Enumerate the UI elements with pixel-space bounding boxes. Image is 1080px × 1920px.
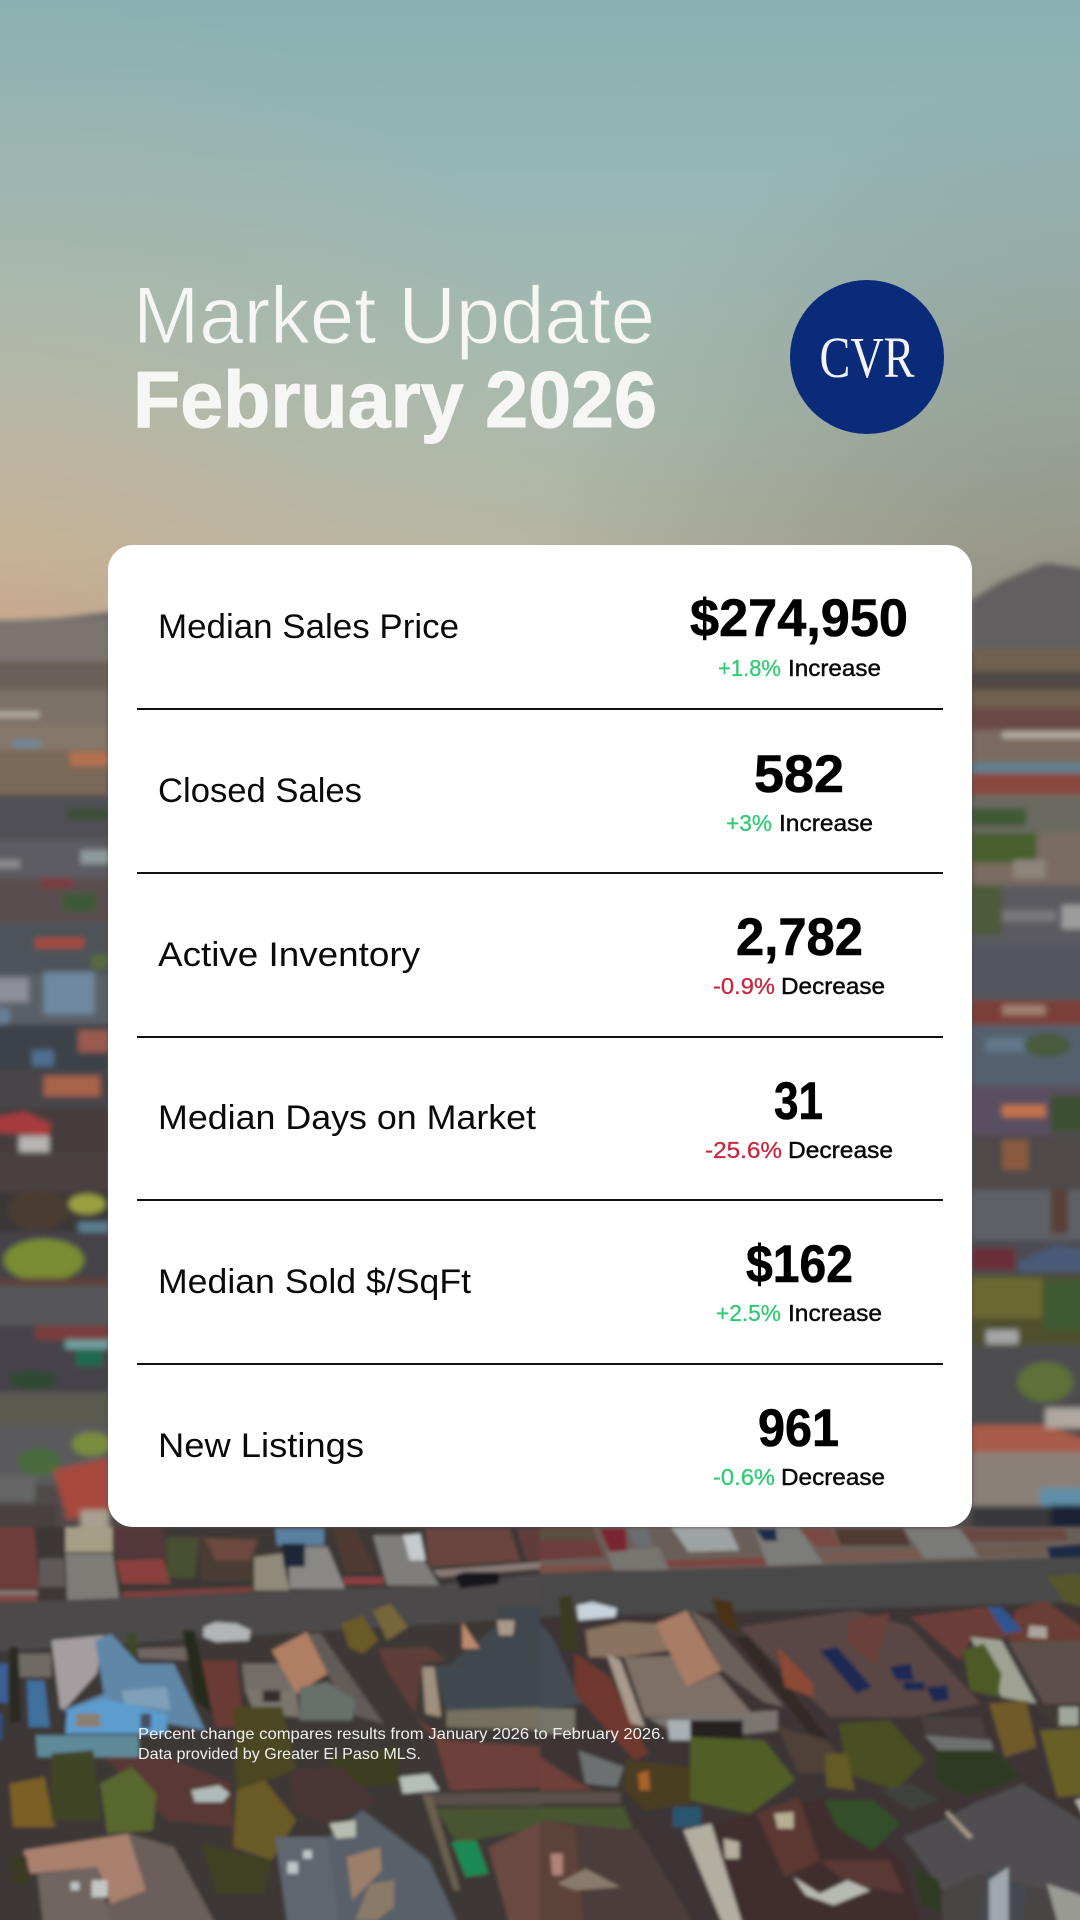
row: median days on market: Median Days on Market (158, 1099, 537, 1137)
title: February 2026 (133, 355, 657, 444)
row: active inventory: -0.9% (713, 973, 775, 999)
row: active inventory: Decrease (781, 973, 885, 999)
row: new listings: 961 (758, 1399, 839, 1458)
row: new listings: -0.6% (713, 1464, 775, 1490)
row: closed sales: Increase (779, 810, 873, 836)
row: new listings: Decrease (781, 1464, 885, 1490)
row: median days on market (158, 1072, 893, 1163)
row: active inventory: 2,782 (736, 908, 863, 967)
footnote: Data provided by Greater El Paso MLS. (138, 1746, 421, 1763)
row: active inventory (158, 908, 885, 999)
row: closed sales: +3% (726, 810, 772, 836)
row: median sold price per square foot: Increase (788, 1300, 882, 1326)
row: closed sales: Closed Sales (158, 772, 362, 810)
row: median sold price per square foot: $162 (746, 1235, 853, 1294)
row: closed sales: 582 (754, 745, 844, 804)
row: new listings (158, 1399, 885, 1490)
row: median sold price per square foot (158, 1235, 882, 1326)
row: median sales price (158, 589, 908, 681)
row: median sales price: +1.8% (718, 655, 781, 681)
footnote: Percent change compares results from January 2026 to February 2026. (138, 1726, 665, 1743)
row: median sold price per square foot: Median Sold $/SqFt (158, 1263, 472, 1301)
panel: market statistics card (108, 545, 972, 1527)
row: median sales price: Increase (788, 655, 881, 681)
row: active inventory: Active Inventory (158, 936, 420, 974)
row: median days on market: 31 (774, 1072, 823, 1131)
row: median sales price: $274,950 (690, 589, 908, 648)
background photo: houses and street foreground (0, 1527, 1080, 1920)
logo: CVR circle (790, 280, 944, 434)
title (133, 271, 657, 444)
row: median sales price: Median Sales Price (158, 608, 459, 646)
row: closed sales (158, 745, 873, 836)
footnote (138, 1726, 665, 1763)
row: median sold price per square foot: +2.5% (716, 1300, 781, 1326)
background photo: distant town, left and right of card (0, 563, 1080, 1580)
row: new listings: New Listings (158, 1427, 364, 1465)
logo: CVR circle: CVR (820, 325, 915, 390)
row: median days on market: Decrease (788, 1137, 893, 1163)
title: Market Update (133, 271, 655, 361)
row: median days on market: -25.6% (705, 1137, 782, 1163)
background photo: sky (0, 0, 1080, 690)
